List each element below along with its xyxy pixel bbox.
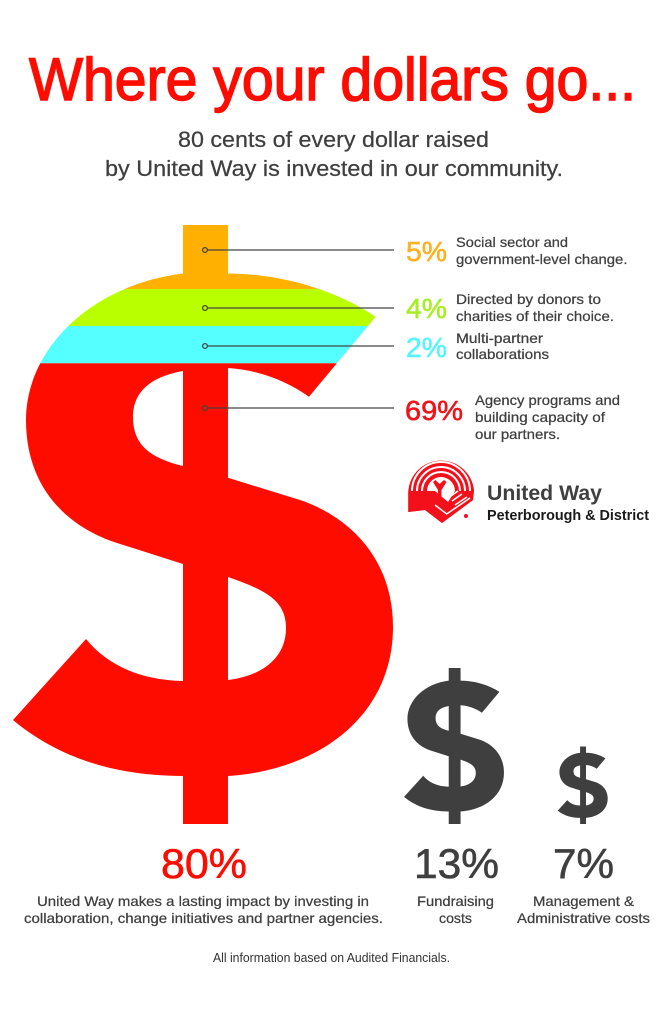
legend: 5% (406, 234, 628, 267)
stat: 13%: Fundraising (417, 893, 494, 909)
leader line: 4% (203, 306, 394, 310)
stat: 7% (517, 840, 650, 926)
segment: 4% green (68, 289, 376, 326)
stat: 7%: Administrative costs (517, 910, 650, 926)
legend: 5%: 5% (406, 236, 447, 267)
segment: 5% orange (124, 225, 319, 289)
title: Where your dollars go... (29, 46, 636, 113)
subtitle: 80 cents of every dollar raised (178, 127, 489, 152)
legend: 4%: 4% (406, 293, 447, 324)
icon: small gray dollar sign (558, 747, 608, 824)
legend: 4%: charities of their choice. (456, 308, 614, 324)
legend: 2%: 2% (406, 332, 447, 363)
stat: 13% (414, 840, 499, 926)
legend: 4%: Directed by donors to (456, 291, 601, 307)
leader line: 5% (203, 248, 394, 252)
legend: 5%: government-level change. (456, 251, 628, 267)
stat: 80%: 80% (161, 840, 247, 887)
stat: 80%: collaboration, change initiatives and partner agencies. (24, 910, 383, 926)
logo text: Peterborough & District (487, 508, 649, 524)
logo text: United Way (487, 482, 602, 505)
subtitle: by United Way is invested in our community. (105, 156, 563, 181)
stat: 13%: costs (439, 910, 472, 926)
icon: medium gray dollar sign (404, 668, 504, 824)
segment: 2% cyan (40, 326, 368, 364)
legend: 2% (406, 330, 549, 363)
legend: 69%: building capacity of (475, 409, 605, 425)
legend: 4% (406, 291, 614, 324)
logo text (487, 482, 649, 524)
stat: 7%: Management & (533, 893, 635, 909)
legend: 69%: our partners. (475, 426, 560, 442)
legend: 69%: 69% (405, 395, 463, 426)
leader line: 69% (203, 406, 394, 410)
legend: 2%: Multi-partner (456, 330, 543, 346)
subtitle (105, 127, 563, 181)
stat: 80%: United Way makes a lasting impact by investing in (37, 893, 369, 909)
stat: 80% (24, 840, 383, 926)
leader line: 2% (203, 344, 394, 348)
chart: large segmented dollar sign (0, 225, 400, 824)
segment: 69% red (0, 363, 400, 824)
legend: 69% (405, 392, 620, 442)
legend: 2%: collaborations (456, 346, 549, 362)
legend: 69%: Agency programs and (475, 392, 620, 408)
stat: 13%: 13% (414, 840, 499, 887)
stat: 7%: 7% (553, 840, 614, 887)
footnote: All information based on Audited Financials. (213, 951, 450, 965)
icon: United Way logo (408, 461, 474, 523)
legend: 5%: Social sector and (456, 234, 568, 250)
